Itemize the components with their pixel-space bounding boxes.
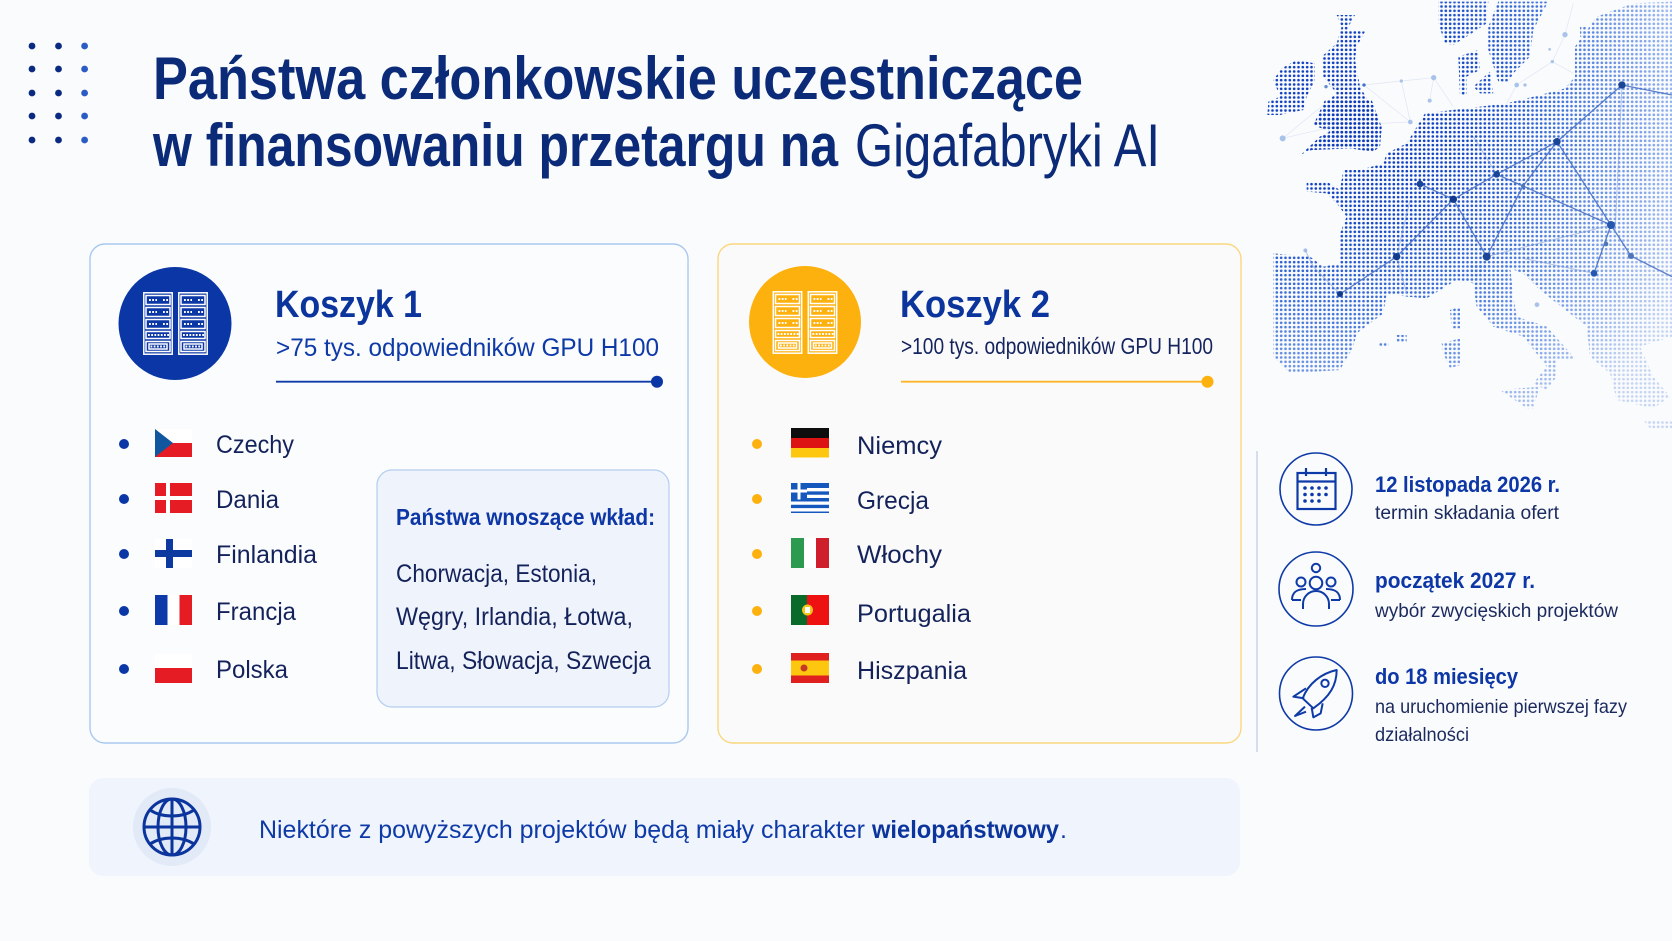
divider with dot [276, 376, 663, 388]
panel: Koszyk 1 [90, 244, 688, 743]
title: Gigafabryki AI [855, 112, 1160, 179]
heading: Koszyk 1: Koszyk 1 [275, 284, 422, 326]
list: Włochy: Włochy [857, 541, 943, 569]
list: Francja [119, 595, 296, 626]
timeline item: deadline: 12 listopada 2026 r. [1375, 472, 1560, 497]
list: Dania: Dania [216, 486, 279, 514]
list: Niemcy [752, 428, 943, 460]
list: Hiszpania [752, 653, 967, 685]
callout: contributing states: Litwa, Słowacja, Szwecja [396, 647, 651, 675]
list: Czechy: Czechy [216, 431, 294, 459]
timeline item: launch: do 18 miesięcy [1375, 664, 1519, 689]
timeline item: launch [1280, 657, 1627, 746]
subheading: >100 tys. odpowiedników GPU H100 [901, 333, 1213, 359]
list: Finlandia: Finlandia [216, 541, 317, 569]
icon: rocket [1280, 657, 1352, 730]
list: Portugalia: Portugalia [857, 600, 971, 628]
list: Grecja [752, 483, 929, 515]
list: Polska: Polska [216, 656, 288, 684]
heading: Koszyk 2: Koszyk 2 [900, 284, 1050, 326]
divider with dot [901, 376, 1214, 388]
list: Włochy [752, 538, 943, 569]
icon: calendar [1280, 453, 1352, 525]
icon: servers on yellow circle [749, 266, 861, 378]
banner text: wielopaństwowy [871, 816, 1059, 844]
callout: contributing states: Węgry, Irlandia, Łotwa, [396, 603, 633, 631]
banner text: . [1060, 816, 1067, 844]
timeline item: selection: wybór zwycięskich projektów [1374, 600, 1619, 622]
title: Państwa członkowskie uczestniczące [153, 45, 1083, 112]
timeline item: launch: działalności [1375, 724, 1469, 746]
list: Hiszpania: Hiszpania [857, 657, 967, 685]
panel: Koszyk 2 [718, 244, 1241, 743]
list: Dania [119, 483, 279, 514]
callout: contributing states [377, 470, 669, 707]
list: Grecja: Grecja [857, 487, 929, 515]
icon: globe [133, 788, 211, 866]
list: Niemcy: Niemcy [857, 432, 943, 460]
timeline item: deadline: termin składania ofert [1375, 502, 1560, 524]
banner text: Niektóre z powyższych projektów będą miały charakter [259, 816, 865, 844]
title: w finansowaniu przetargu na [152, 112, 839, 179]
list: Francja: Francja [216, 598, 296, 626]
timeline item: launch: na uruchomienie pierwszej fazy [1375, 696, 1627, 718]
list: Polska [119, 654, 288, 684]
dotted map of Europe with network [1240, 0, 1672, 440]
timeline item: deadline [1280, 453, 1560, 525]
list: Czechy [119, 429, 294, 459]
timeline item: selection: początek 2027 r. [1375, 568, 1535, 593]
subheading: >75 tys. odpowiedników GPU H100 [276, 334, 659, 362]
callout: contributing states: Państwa wnoszące wkład: [396, 504, 655, 530]
timeline divider [1256, 451, 1258, 752]
icon: people [1279, 552, 1353, 626]
list: Finlandia [119, 539, 317, 569]
callout: contributing states: Chorwacja, Estonia, [396, 560, 597, 588]
decorative dot grid [29, 43, 88, 143]
timeline item: selection [1279, 552, 1619, 626]
icon: servers on blue circle [118, 267, 232, 380]
title [152, 45, 1160, 179]
banner: multinational note [89, 778, 1240, 876]
list: Portugalia [752, 595, 971, 628]
